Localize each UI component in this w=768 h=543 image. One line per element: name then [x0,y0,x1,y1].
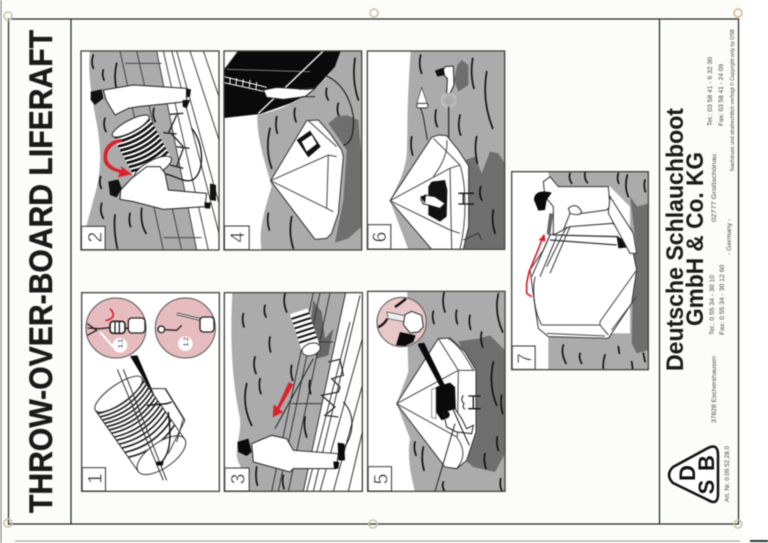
company name [662,108,709,371]
company name: Deutsche Schlauchboot [662,108,689,371]
panel 4: crew boarding from the ship: 4 [228,232,249,243]
crewman on ladder [263,87,315,99]
stand [322,359,343,417]
distant canister [290,308,322,358]
title: THROW-OVER-BOARD LIFERAFT [23,30,59,513]
crewman [252,435,338,472]
detail circle 1.2: 1.2 [183,337,190,346]
detail circle 1.2 [155,298,215,358]
bottom crewman [108,167,216,209]
red arrow [104,139,131,177]
panel 1: securing the painter line [82,293,219,491]
crewman [543,177,610,235]
panel 5: opening the raft [368,291,505,491]
contact details: - Germany - [726,219,733,255]
panel 2: rolling the canister: 2 [86,232,107,243]
logo: DSB triangle [669,447,719,502]
contact details: Fax: 0 55 34 - 30 12 60 [719,264,726,335]
company name: GmbH & Co. KG [682,152,709,326]
red arrow [527,235,544,297]
panel 6: righting a swimmer [367,51,505,249]
contact details: Tel.: 0 55 34 - 30 10 [709,275,716,335]
contact details [707,28,736,502]
contact details: 02777 Großschönau [711,154,718,222]
detail circle 1.1 [86,298,146,358]
panel 4: crew boarding from the ship [224,51,362,250]
panel 6: righting a swimmer: 6 [370,232,391,242]
panel 7: crewman climbing aboard: 7 [515,353,536,364]
raft [271,120,343,239]
panel 3: pulling the painter line [224,293,362,491]
raft [397,338,476,469]
raft shadow [328,115,362,243]
contact details: 37828 Eschershausen [711,356,718,423]
logo: DSB triangle: D [675,465,700,481]
contact details: Art. Nr. 0.09.52.28.0 [724,446,731,502]
canister with straps [111,114,173,176]
panel 1: securing the painter line: 1 [85,473,106,484]
canister [94,374,188,476]
panel 5: opening the raft: 5 [371,474,392,484]
top crewman [91,85,191,115]
logo: DSB triangle: B [694,455,719,471]
crew member in opening [443,409,473,434]
panel 7: crewman climbing aboard [512,172,648,370]
detail circle [377,297,426,347]
stand and rope [163,113,202,181]
contact details: Tel.: 03 58 41 - 6 32 30 [707,57,714,126]
logo: DSB triangle: S [694,480,719,494]
contact details: Fax: 03 58 41 - 24 09 [718,64,725,126]
red arrow [273,382,293,417]
contact details: Nachdruck und strafrechtlich verfolgt © Copyright only by DSB [729,28,736,171]
detail circle 1.1: 1.1 [118,338,125,348]
panel 3: pulling the painter line: 3 [228,474,249,484]
cradle [117,369,185,480]
raft body [530,223,637,338]
panel 2: rolling the canister [81,51,219,250]
